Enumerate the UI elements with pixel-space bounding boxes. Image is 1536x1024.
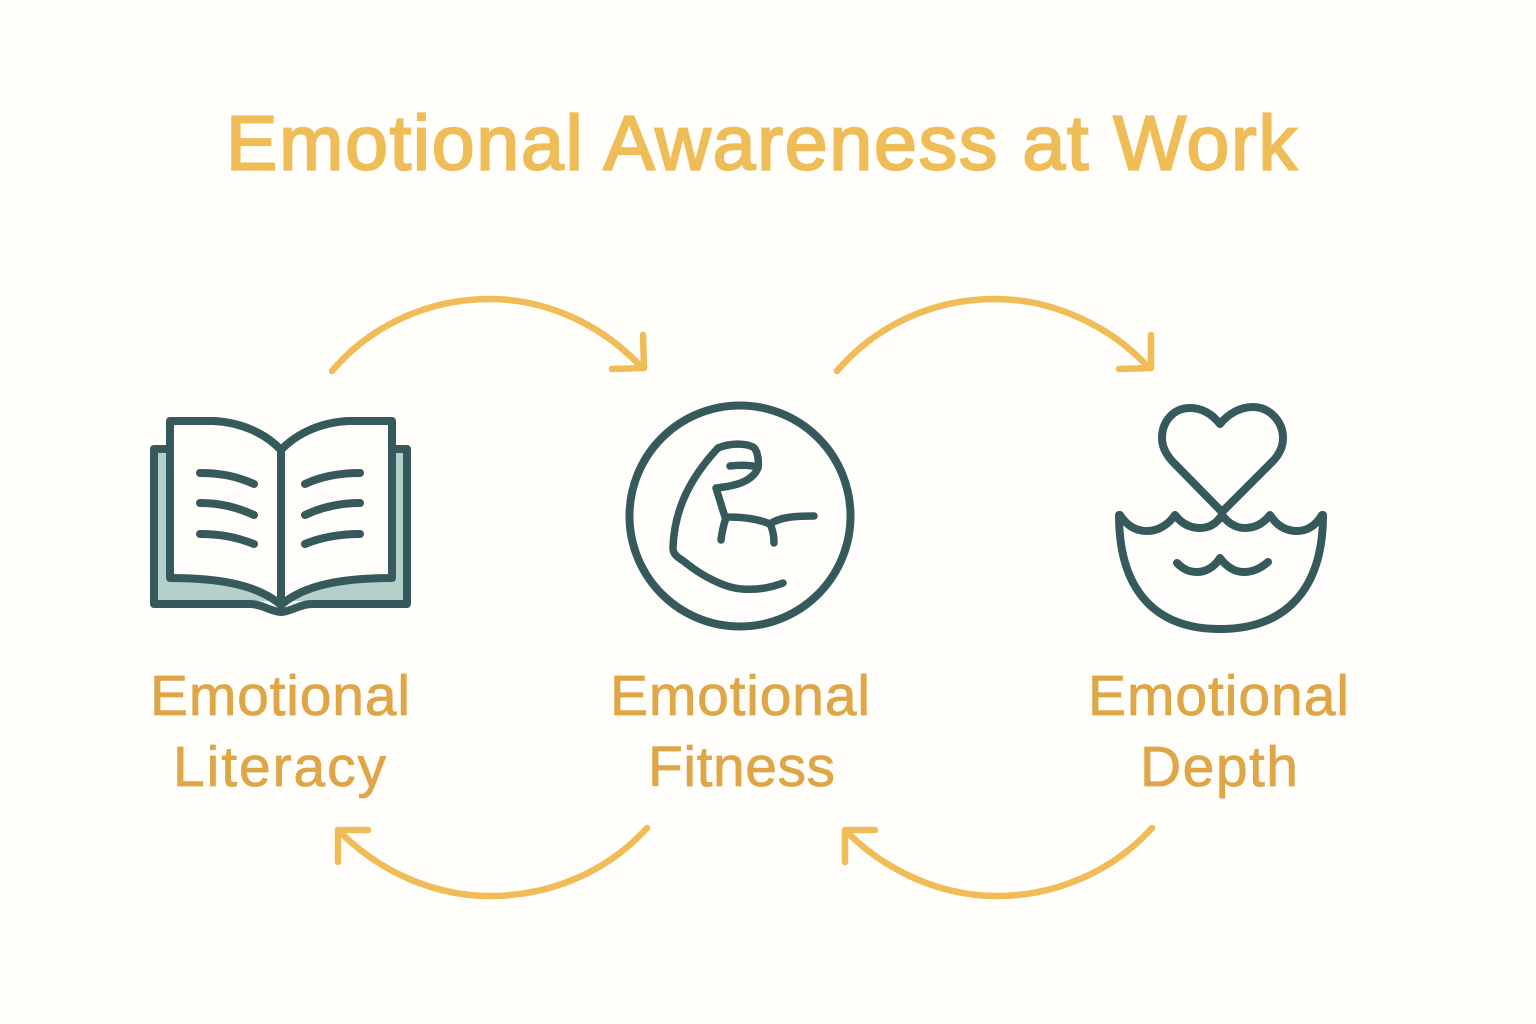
arrow: depth to fitness [845,828,1152,896]
arrow: fitness to literacy [338,828,647,896]
label: Emotional Depth [1088,664,1349,799]
title: Emotional Awareness at Work [226,100,1298,186]
label: Emotional Fitness [610,664,870,799]
book text lines [200,473,360,544]
label: Emotional Depth: Depth [1140,735,1298,799]
arrow: fitness to depth [837,299,1151,371]
label: Emotional Literacy: Literacy [173,735,386,799]
label: Emotional Fitness: Fitness [648,735,835,799]
label: Emotional Depth: Emotional [1088,664,1349,728]
icon: heart over water [1119,407,1323,629]
label: Emotional Literacy [150,664,410,799]
label: Emotional Fitness: Emotional [610,664,870,728]
arrow: literacy to fitness [332,299,644,371]
icon: open book [154,421,407,612]
label: Emotional Literacy: Emotional [150,664,410,728]
icon: flexed arm in circle [630,406,850,626]
